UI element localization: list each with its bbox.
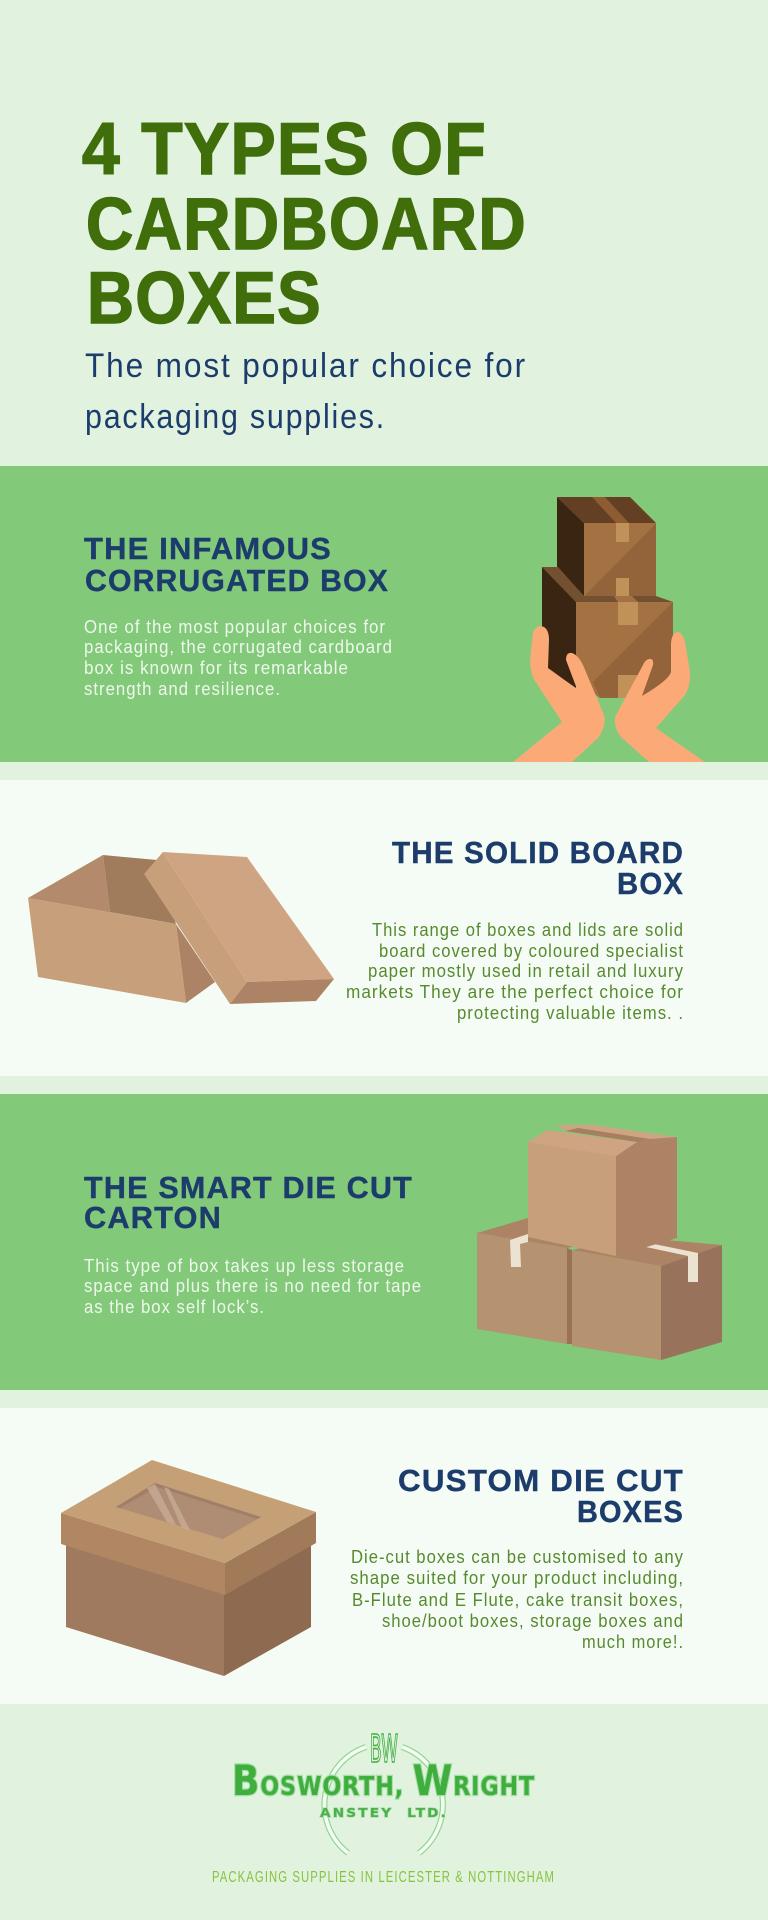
text: smart die cut carton description: This type of box takes up less storage <box>84 1255 405 1276</box>
text: corrugated box description: strength and resilience. <box>84 678 281 699</box>
text: custom die cut boxes description <box>350 1546 684 1652</box>
heading: smart die cut carton <box>84 1170 413 1235</box>
text: solid board box description: markets They are the perfect choice for <box>346 981 684 1002</box>
text: custom die cut boxes description: Die-cut boxes can be customised to any <box>351 1546 684 1567</box>
text: solid board box description: paper mostly used in retail and luxury <box>368 960 684 981</box>
subtitle <box>85 347 527 436</box>
logo: Bosworth, Wright Anstey Ltd <box>232 1727 535 1853</box>
heading: smart die cut carton: CARTON <box>84 1200 222 1235</box>
text: corrugated box description <box>84 616 393 699</box>
text: corrugated box description: box is known for its remarkable <box>84 657 349 678</box>
text: solid board box description: This range of boxes and lids are solid <box>372 919 684 940</box>
heading: custom die cut boxes: CUSTOM DIE CUT <box>398 1463 684 1498</box>
heading: solid board box: BOX <box>617 866 684 901</box>
illustration: three stacked boxes <box>477 1125 722 1360</box>
illustration: hands holding two boxes <box>513 497 705 762</box>
logo wordmark: BOSWORTH, WRIGHT <box>232 1756 535 1805</box>
heading: custom die cut boxes <box>398 1463 684 1529</box>
logo ring <box>324 1747 443 1853</box>
text: solid board box description: protecting valuable items. . <box>457 1002 684 1023</box>
heading: smart die cut carton: THE SMART DIE CUT <box>84 1170 413 1205</box>
text: custom die cut boxes description: much more!. <box>582 1631 684 1652</box>
title: 4 TYPES OF <box>82 109 487 190</box>
panel: custom die cut boxes <box>0 1408 768 1704</box>
heading: corrugated box <box>84 531 389 598</box>
text: custom die cut boxes description: shoe/boot boxes, storage boxes and <box>382 1610 684 1631</box>
heading: custom die cut boxes: BOXES <box>577 1494 684 1529</box>
heading: corrugated box: THE INFAMOUS <box>84 531 332 566</box>
heading: solid board box <box>392 835 684 901</box>
illustration: open box with lid <box>28 852 334 1004</box>
subtitle: The most popular choice for <box>85 347 527 385</box>
subtitle: packaging supplies. <box>85 398 386 436</box>
text: smart die cut carton description: as the box self lock’s. <box>84 1296 265 1317</box>
text: solid board box description <box>346 919 684 1023</box>
text: smart die cut carton description <box>84 1255 422 1317</box>
title: CARDBOARD <box>86 184 527 265</box>
text: custom die cut boxes description: B-Flute and E Flute, cake transit boxes, <box>352 1589 684 1610</box>
text: corrugated box description: packaging, the corrugated cardboard <box>84 636 393 657</box>
panel: solid board box <box>0 780 768 1076</box>
text: smart die cut carton description: space and plus there is no need for tape <box>84 1275 422 1296</box>
logo: Bosworth, Wright Anstey Ltd: BW <box>370 1727 398 1771</box>
illustration: box with window lid <box>61 1460 316 1676</box>
text: custom die cut boxes description: shape suited for your product including, <box>350 1567 684 1588</box>
title: BOXES <box>87 258 322 339</box>
panel: corrugated box <box>0 466 768 762</box>
title <box>82 109 527 339</box>
heading: corrugated box: CORRUGATED BOX <box>85 563 389 598</box>
heading: solid board box: THE SOLID BOARD <box>392 835 684 870</box>
logo sub-line: ANSTEY LTD. <box>320 1805 448 1820</box>
text: corrugated box description: One of the most popular choices for <box>84 616 386 637</box>
text: solid board box description: board covered by coloured specialist <box>379 940 684 961</box>
footer tagline: PACKAGING SUPPLIES IN LEICESTER & NOTTINGHAM <box>212 1869 555 1886</box>
panel: smart die cut carton <box>0 1094 768 1390</box>
